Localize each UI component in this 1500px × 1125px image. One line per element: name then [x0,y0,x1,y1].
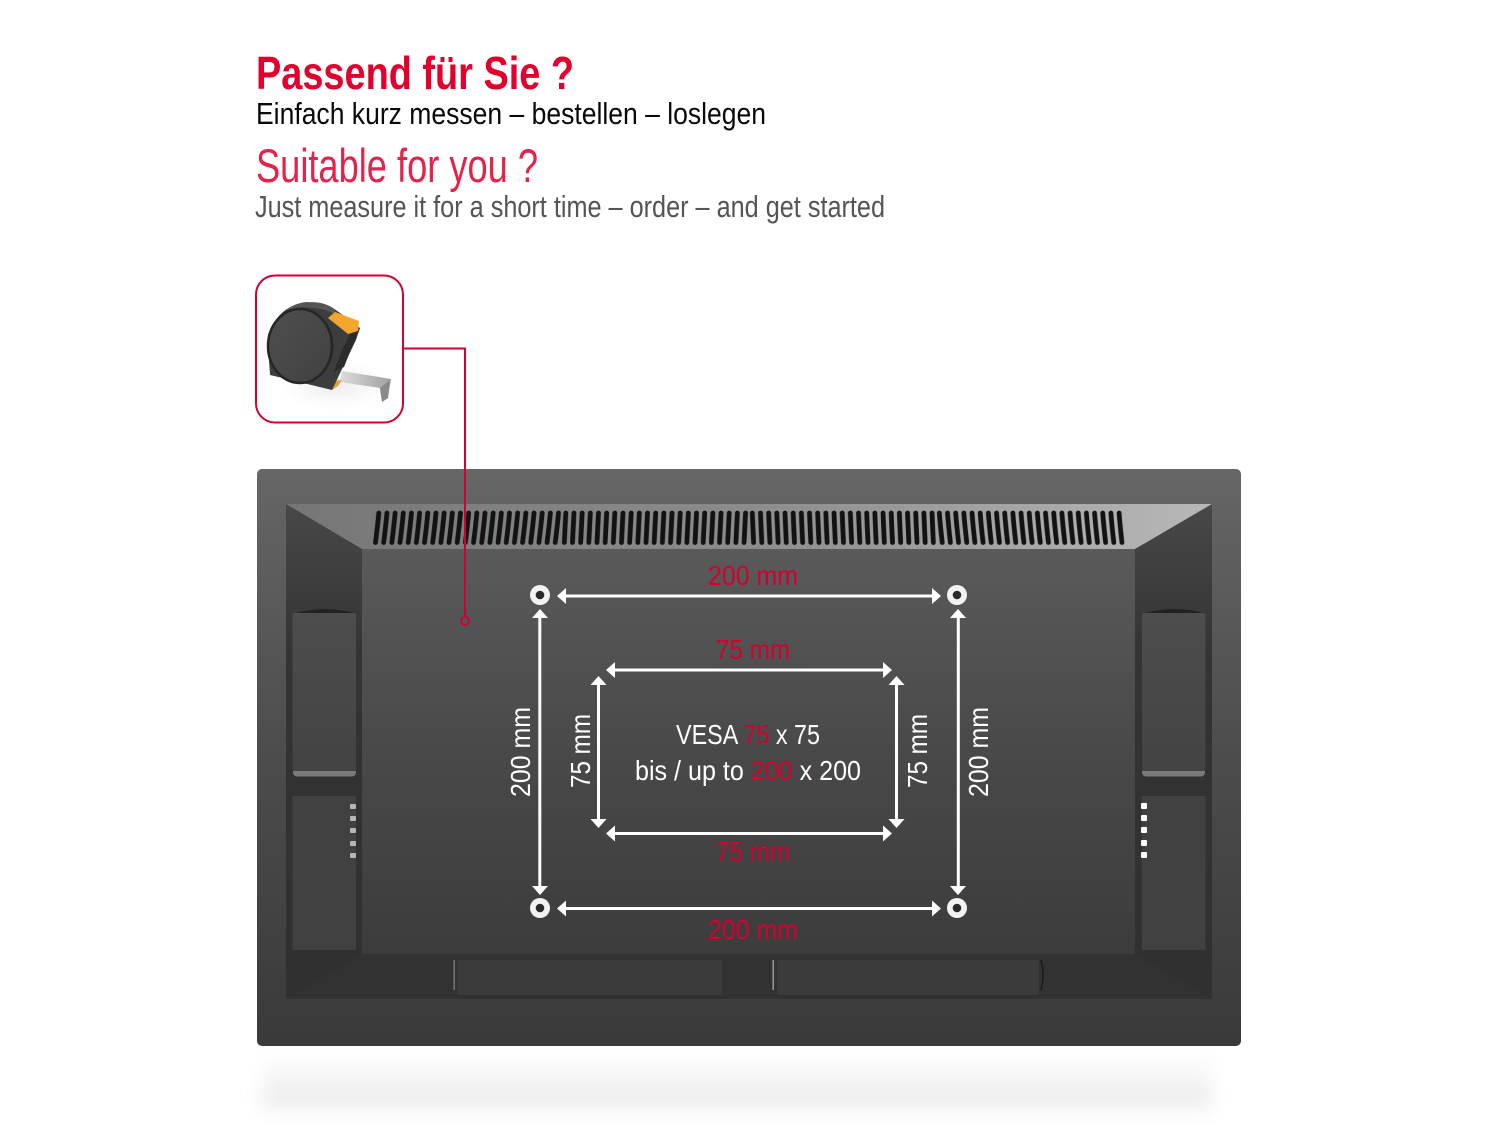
left lower pad [292,796,356,950]
monitor back panel [257,469,1241,1046]
metal tape [340,371,391,402]
labels: horizontal dimensions [708,560,798,945]
orange button [328,312,359,334]
title: Passend für Sie: Passend für Sie ? [256,47,574,99]
center VESA text: bis / up to 200 x 200 [635,755,861,786]
right connector dots [1141,803,1147,858]
arrows: 75 mm [590,662,904,842]
labels: vertical dimensions: 200 mm [505,707,536,797]
left upper pad [292,609,356,776]
top bevel [286,504,1212,549]
center VESA text [635,719,861,786]
labels: horizontal dimensions: 200 mm [708,914,798,945]
labels: vertical dimensions: 75 mm [902,714,933,788]
title: Suitable for you: Suitable for you ? [256,139,538,192]
ventilation slots [373,508,1125,548]
labels: horizontal dimensions: 200 mm [708,560,798,591]
labels: vertical dimensions [505,707,994,797]
icon: tape measure [268,302,391,407]
right upper pad [1142,609,1206,776]
labels: vertical dimensions: 75 mm [565,714,596,788]
recess walls [286,504,1212,999]
center VESA text: VESA 75 x 75 [676,719,820,750]
center mounting plate [362,549,1135,954]
right lower pad [1142,796,1206,950]
left connector dots [350,804,356,858]
connector line with end marker [403,348,469,625]
tape measure callout box [256,276,403,422]
arrows: 200 mm [532,588,966,916]
subtitle: German instruction: Einfach kurz messen – bestellen – loslegen [256,96,766,131]
labels: vertical dimensions: 200 mm [963,707,994,797]
tape body [268,302,360,390]
labels: horizontal dimensions: 75 mm [716,634,790,665]
subtitle: English instruction: Just measure it for a short time – order – and get started [255,189,885,224]
bottom left cover [454,960,722,995]
mounting holes [530,585,967,918]
bottom right cover [772,960,1043,995]
TV shadow [262,1052,1212,1110]
labels: horizontal dimensions: 75 mm [716,836,790,867]
